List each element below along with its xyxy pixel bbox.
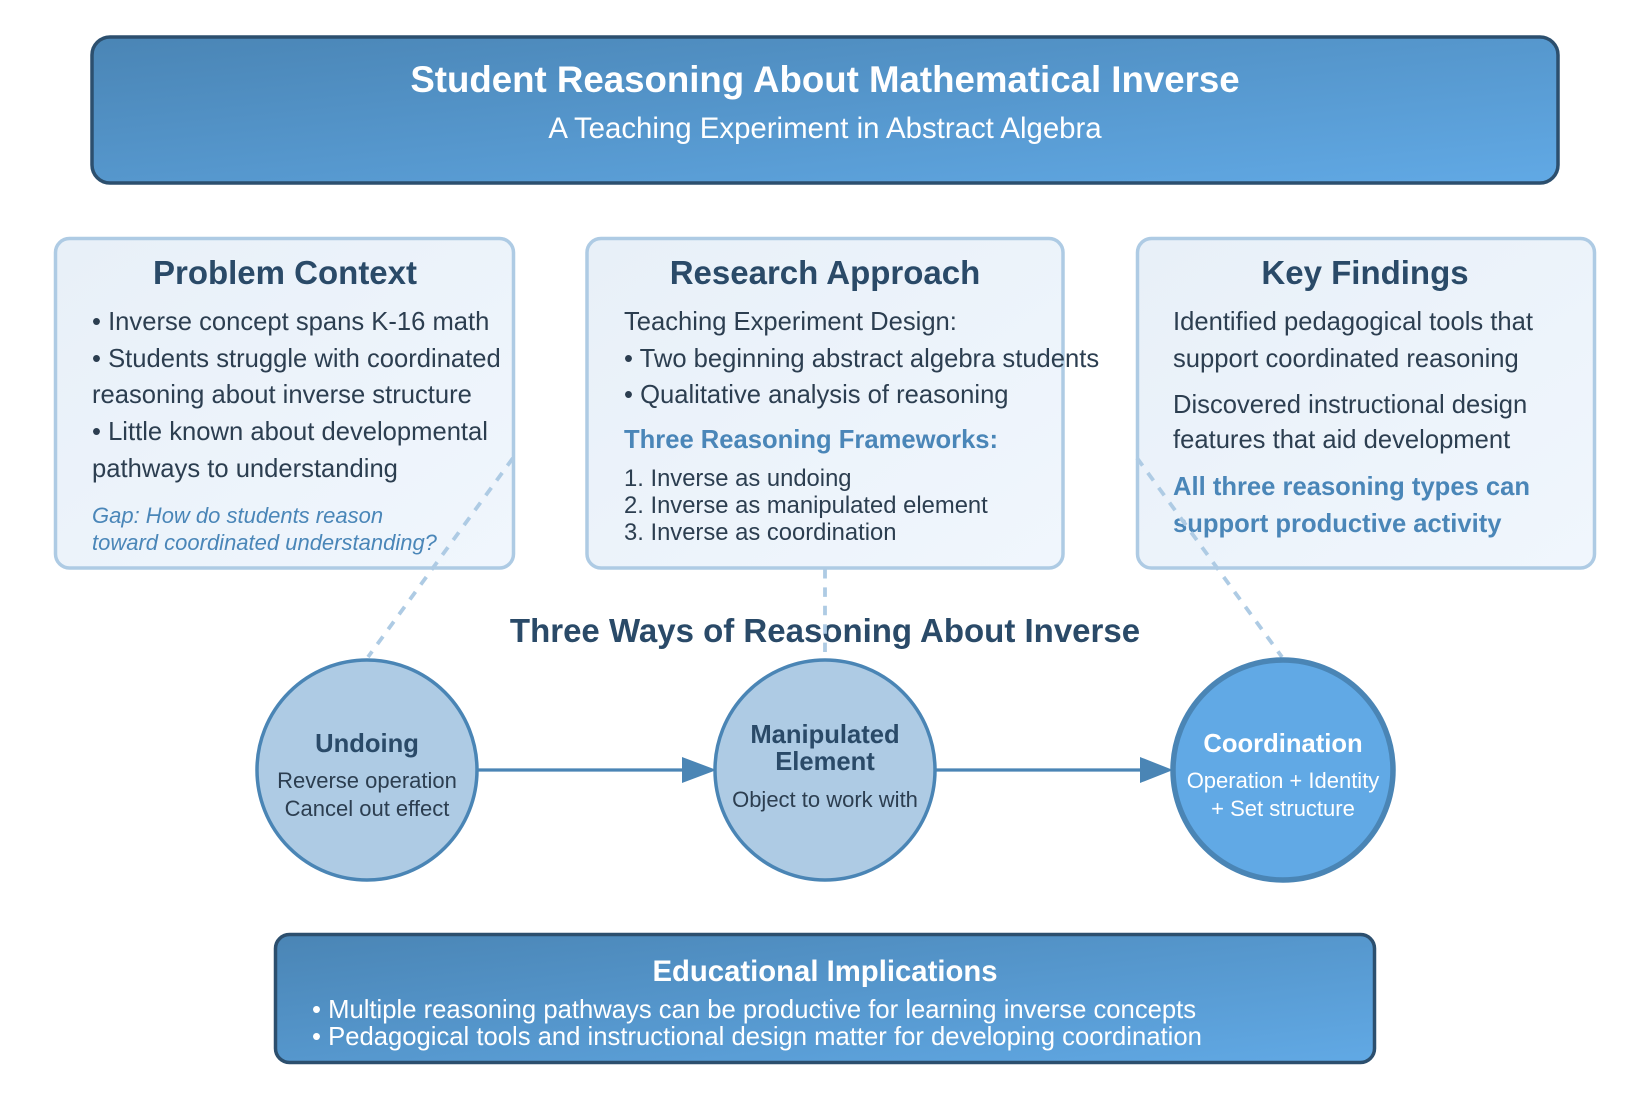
subtitle: A Teaching Experiment in Abstract Algebra <box>548 112 1102 145</box>
node: coordination <box>1173 660 1393 880</box>
panel: research approach <box>587 238 1099 568</box>
node: manipulated element <box>715 660 935 880</box>
dashed connectors from panels to nodes <box>368 458 1282 657</box>
node: coordination: + Set structure <box>1211 796 1355 821</box>
node: manipulated element: Manipulated <box>750 721 900 749</box>
frameworks list: 3. Inverse as coordination <box>624 519 897 546</box>
findings text: features that aid development <box>1173 426 1510 454</box>
panel: problem context <box>56 238 514 568</box>
key finding highlight <box>1173 473 1530 538</box>
title: Student Reasoning About Mathematical Inverse <box>410 59 1240 100</box>
research gap note: toward coordinated understanding? <box>92 530 438 555</box>
subheading: frameworks: Three Reasoning Frameworks: <box>624 426 998 454</box>
implications list: • Pedagogical tools and instructional design matter for developing coordination <box>312 1023 1202 1051</box>
node: coordination: Coordination <box>1203 730 1363 758</box>
problem context list: • Students struggle with coordinated <box>92 345 501 373</box>
panel: educational implications <box>276 934 1374 1062</box>
heading: educational implications: Educational Implications <box>652 955 998 988</box>
problem context list: pathways to understanding <box>92 455 398 483</box>
node: undoing: Undoing <box>315 730 419 758</box>
implications list: • Multiple reasoning pathways can be productive for learning inverse concepts <box>312 996 1196 1024</box>
frameworks list: 2. Inverse as manipulated element <box>624 492 988 519</box>
key finding highlight: support productive activity <box>1173 510 1502 538</box>
section heading: Three Ways of Reasoning About Inverse <box>510 612 1140 649</box>
heading: key findings: Key Findings <box>1261 254 1469 291</box>
frameworks list <box>624 465 988 546</box>
frameworks list: 1. Inverse as undoing <box>624 465 852 492</box>
findings text: support coordinated reasoning <box>1173 345 1519 373</box>
heading: problem context: Problem Context <box>153 254 417 291</box>
node: undoing <box>257 660 477 880</box>
research design list: • Qualitative analysis of reasoning <box>624 381 1009 409</box>
problem context list <box>92 308 501 483</box>
research design list: • Two beginning abstract algebra students <box>624 345 1099 373</box>
research gap note <box>92 503 438 555</box>
findings text <box>1173 308 1533 454</box>
research design list <box>624 308 1099 409</box>
node: manipulated element: Element <box>775 748 875 776</box>
problem context list: • Inverse concept spans K-16 math <box>92 308 489 336</box>
panel: key findings <box>1138 238 1594 568</box>
header banner <box>92 37 1558 183</box>
research gap note: Gap: How do students reason <box>92 503 383 528</box>
problem context list: • Little known about developmental <box>92 418 488 446</box>
arrow: undoing to manipulated element <box>478 757 716 783</box>
findings text: Discovered instructional design <box>1173 391 1527 419</box>
heading: research approach: Research Approach <box>670 254 980 291</box>
key finding highlight: All three reasoning types can <box>1173 473 1530 501</box>
research design list: Teaching Experiment Design: <box>624 308 957 336</box>
node: undoing: Reverse operation <box>277 768 457 793</box>
node: manipulated element: Object to work with <box>732 787 918 812</box>
arrow: manipulated element to coordination <box>936 757 1173 783</box>
findings text: Identified pedagogical tools that <box>1173 308 1533 336</box>
node: undoing: Cancel out effect <box>285 796 449 821</box>
node: coordination: Operation + Identity <box>1187 768 1379 793</box>
implications list <box>312 996 1202 1051</box>
problem context list: reasoning about inverse structure <box>92 381 472 409</box>
